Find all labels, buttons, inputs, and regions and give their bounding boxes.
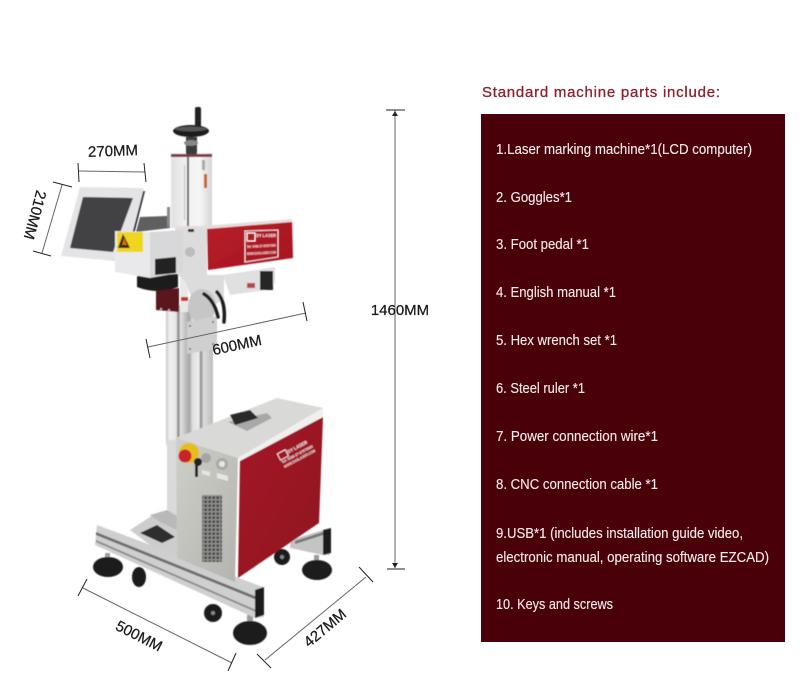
dimension: 1460MM: 1460MM [371,302,429,319]
dimension: 500MM: 500MM [113,618,165,655]
dimension: 427MM: 427MM [301,606,350,651]
ventilation slots [202,495,222,562]
black locking handles [204,292,224,322]
red laser housing [176,219,293,270]
item 3: 3. Foot pedal *1 [496,236,589,253]
rear base rail [290,528,331,555]
column pedestal [150,510,177,530]
dimension: 1460MM [371,110,429,569]
dimension: 210MM: 210MM [20,189,49,241]
laser head box [115,230,183,278]
front base rail [95,525,264,618]
item 9 [496,525,769,566]
red laser housing: Tel: 0086-27-87870580 [247,243,276,249]
panel: parts list [481,114,785,642]
dimension: 427MM [257,567,373,668]
item 10: 10. Keys and screws [496,596,613,613]
control box [176,398,323,582]
box logo: Tel: 0086-27-87870580 [281,445,314,465]
heading: Standard machine parts include: [482,84,720,101]
dark red mounting plate [156,288,179,312]
motor under housing [223,267,275,295]
box logo: WWW.DXSLASER.COM [283,449,316,469]
base cross rail [130,515,177,560]
touch screen monitor [61,187,145,262]
scale strip [180,278,188,312]
height adjustment handwheel [173,107,209,154]
dimension: 600MM [146,302,307,359]
upper aluminium column [171,153,212,228]
item 7: 7. Power connection wire*1 [496,428,658,445]
item 4: 4. English manual *1 [496,284,616,301]
lower aluminium column [166,305,213,520]
item 8: 8. CNC connection cable *1 [496,476,658,493]
key switch and connector [194,453,228,481]
item 9: 9.USB*1 (includes installation guide video, [496,525,743,542]
item 9: electronic manual, operating software EZCAD) [496,549,769,566]
item 6: 6. Steel ruler *1 [496,380,585,397]
dimension: 210MM [20,182,72,256]
box logo [277,438,316,469]
silver arm and swivel joint [175,227,224,323]
dimension: 270MM: 270MM [88,142,138,161]
emergency stop [178,443,199,463]
machine illustration [61,107,332,645]
dimension: 500MM [78,579,236,671]
red laser housing: DY LASER [256,233,277,238]
dimension: 600MM: 600MM [211,332,263,359]
item 5: 5. Hex wrench set *1 [496,332,617,349]
item 1: 1.Laser marking machine*1(LCD computer) [496,141,752,158]
mount plate [187,316,217,354]
leveling feet and casters [93,549,332,645]
scan lens [137,274,178,291]
item 2: 2. Goggles*1 [496,189,572,206]
red laser housing: WWW.DXSLASER.COM [247,250,276,256]
dimension: 270MM [78,142,146,182]
monitor bracket [136,207,170,232]
box logo: DY LASER [287,440,309,455]
